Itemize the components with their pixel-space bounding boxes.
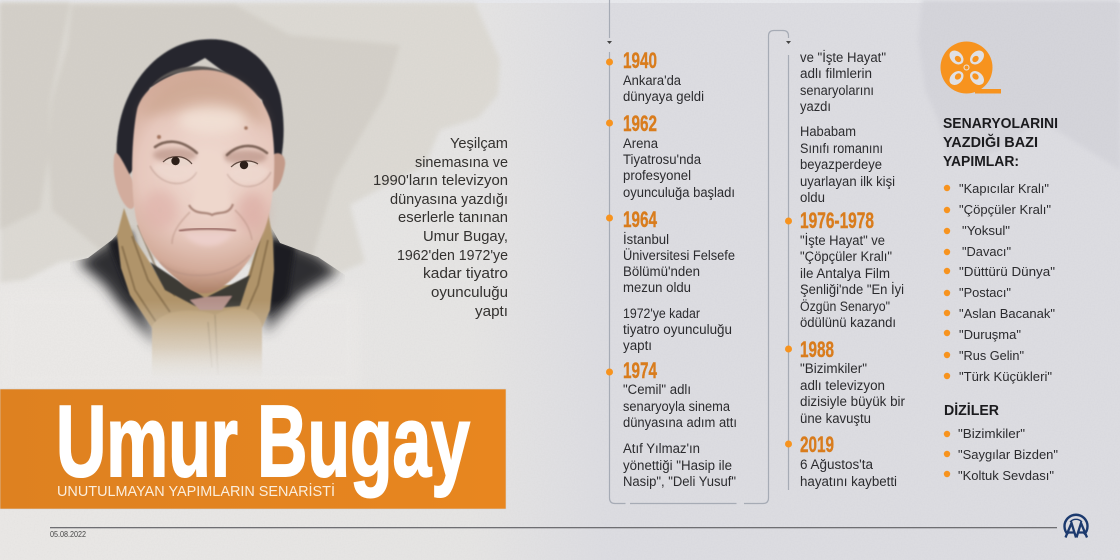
event 1962: profesyonel (623, 168, 691, 183)
list: series: "Saygılar Bizden" (958, 447, 1058, 462)
list: screenplays (944, 181, 1055, 384)
event 2019: 2019 (800, 432, 834, 457)
list: screenplays: "Kapıcılar Kralı" (959, 181, 1049, 196)
list: screenplays: "Türk Küçükleri" (959, 369, 1052, 384)
intro paragraph: yaptı (475, 304, 508, 320)
continuation of 1974: uyarlayan ilk kişi (800, 174, 895, 189)
list: screenplays: "Postacı" (959, 285, 1011, 300)
intro paragraph: Umur Bugay, (423, 229, 508, 245)
event 1974: "Cemil" adlı (623, 382, 691, 397)
scarf (117, 208, 274, 380)
event 1988: üne kavuştu (800, 411, 871, 426)
brows (155, 142, 267, 155)
continuation of 1974 (800, 50, 895, 205)
eye bags (156, 164, 268, 182)
heading: screenplays: YAZDIĞI BAZI (943, 133, 1038, 151)
event 1974: 1974 (623, 358, 658, 383)
event 1988: "Bizimkiler" (800, 361, 867, 376)
event 1976-1978: ödülünü kazandı (800, 315, 896, 330)
heading: screenplays (943, 115, 1058, 170)
event 1988: 1988 (800, 337, 834, 362)
intro paragraph: sinemasına ve (415, 155, 508, 171)
continuation of 1974: yazdı (800, 99, 831, 114)
mouth (179, 229, 236, 231)
event 1964: Üniversitesi Felsefe (623, 248, 735, 263)
event 1940: dünyaya geldi (623, 89, 704, 104)
heading: screenplays: YAPIMLAR: (943, 153, 1019, 170)
list: screenplays: "Davacı" (962, 244, 1011, 259)
event 1964: tiyatro oyunculuğu (623, 322, 732, 337)
list: screenplays: "Rus Gelin" (959, 348, 1024, 363)
event 1976-1978: "İşte Hayat" ve (800, 233, 885, 248)
subtitle: UNUTULMAYAN YAPIMLARIN SENARİSTİ (57, 482, 335, 500)
intro paragraph: 1962'den 1972'ye (397, 248, 508, 264)
timeline connector (607, 0, 791, 504)
continuation of 1974: oldu (800, 190, 825, 205)
chin fold (160, 255, 250, 275)
event 2019 (785, 432, 897, 489)
event 1964: mezun oldu (623, 280, 691, 295)
cheek shading (144, 190, 178, 227)
heading: screenplays: SENARYOLARINI (943, 115, 1058, 132)
continuation of 1974: Sınıfı romanını (800, 141, 883, 156)
age spots (157, 126, 248, 139)
date: 05.08.2022 (50, 530, 86, 539)
list: series: "Koltuk Sevdası" (958, 468, 1054, 483)
jacket (78, 232, 338, 350)
event 1976-1978 (785, 208, 904, 330)
event 1962: 1962 (623, 111, 657, 136)
nose (196, 152, 199, 154)
intro paragraph: kadar tiyatro (423, 266, 508, 282)
eye sockets (153, 148, 197, 162)
continuation of 1974: Hababam (800, 124, 856, 139)
list: screenplays: "Yoksul" (962, 223, 1010, 238)
event 1962 (606, 111, 735, 200)
forehead tone (140, 76, 268, 128)
event 1974 (606, 358, 737, 489)
list: screenplays: "Duruşma" (959, 327, 1021, 342)
event 2019: 6 Ağustos'ta (800, 457, 874, 472)
continuation of 1974: beyazperdeye (800, 157, 882, 172)
event 1974: Nasip", "Deli Yusuf" (623, 474, 736, 489)
intro paragraph (373, 136, 508, 320)
shirt collar (150, 262, 250, 310)
intro paragraph: eserlerle tanınan (398, 210, 508, 226)
hair (117, 39, 284, 178)
event 1988: dizisiyle büyük bir (800, 394, 906, 409)
continuation of 1974: adlı filmlerin (800, 66, 872, 81)
intro paragraph: oyunculuğu (431, 285, 508, 301)
title: Umur Bugay (56, 386, 470, 498)
event 1940 (606, 48, 704, 104)
icon: film reel (940, 42, 1001, 94)
event 1964: Bölümü'nden (623, 264, 700, 279)
event 2019: hayatını kaybetti (800, 474, 897, 489)
event 1976-1978: Şenliği'nde "En İyi (800, 282, 904, 297)
intro paragraph: 1990'ların televizyon (373, 173, 508, 189)
ears (114, 153, 136, 209)
intro paragraph: dünyasına yazdığı (390, 192, 508, 208)
title band (0, 386, 506, 509)
event 1988: adlı televizyon (800, 378, 885, 393)
heading: series: DİZİLER (944, 402, 999, 419)
timeline: left column (606, 48, 737, 489)
event 1976-1978: ile Antalya Film (800, 266, 890, 281)
icon: AA logo (1064, 515, 1088, 538)
event 1964: 1972'ye kadar (623, 306, 700, 321)
continuation of 1974: senaryolarını (800, 83, 874, 98)
list: screenplays: "Çöpçüler Kralı" (959, 202, 1051, 217)
event 1976-1978: "Çöpçüler Kralı" (800, 249, 892, 264)
event 1964: yaptı (623, 338, 652, 353)
event 1962: oyunculuğa başladı (623, 185, 735, 200)
list: series (944, 426, 1058, 483)
event 1988 (785, 337, 906, 426)
event 1974: Atıf Yılmaz'ın (623, 441, 700, 456)
event 1976-1978: Özgün Senaryo" (800, 299, 890, 314)
timeline: right column (785, 50, 906, 489)
event 1940: Ankara'da (623, 73, 682, 88)
face (132, 70, 274, 293)
continuation of 1974: ve "İşte Hayat" (800, 50, 886, 65)
event 1962: Arena (623, 136, 659, 151)
event 1940: 1940 (623, 48, 657, 73)
list: screenplays: "Düttürü Dünya" (959, 264, 1055, 279)
list: series: "Bizimkiler" (958, 426, 1025, 441)
eyes (164, 158, 256, 166)
event 1976-1978: 1976-1978 (800, 208, 874, 233)
event 1974: yönettiği "Hasip ile (623, 458, 732, 473)
event 1962: Tiyatrosu'nda (623, 152, 702, 167)
event 1974: senaryoyla sinema (623, 399, 731, 414)
portrait of Umur Bugay (78, 39, 338, 380)
event 1964: 1964 (623, 207, 658, 232)
event 1964: İstanbul (623, 232, 669, 247)
list: screenplays: "Aslan Bacanak" (959, 306, 1055, 321)
event 1974: dünyasına adım attı (623, 415, 737, 430)
footer rule (50, 527, 1057, 528)
intro paragraph: Yeşilçam (450, 136, 508, 152)
event 1964 (606, 207, 735, 353)
